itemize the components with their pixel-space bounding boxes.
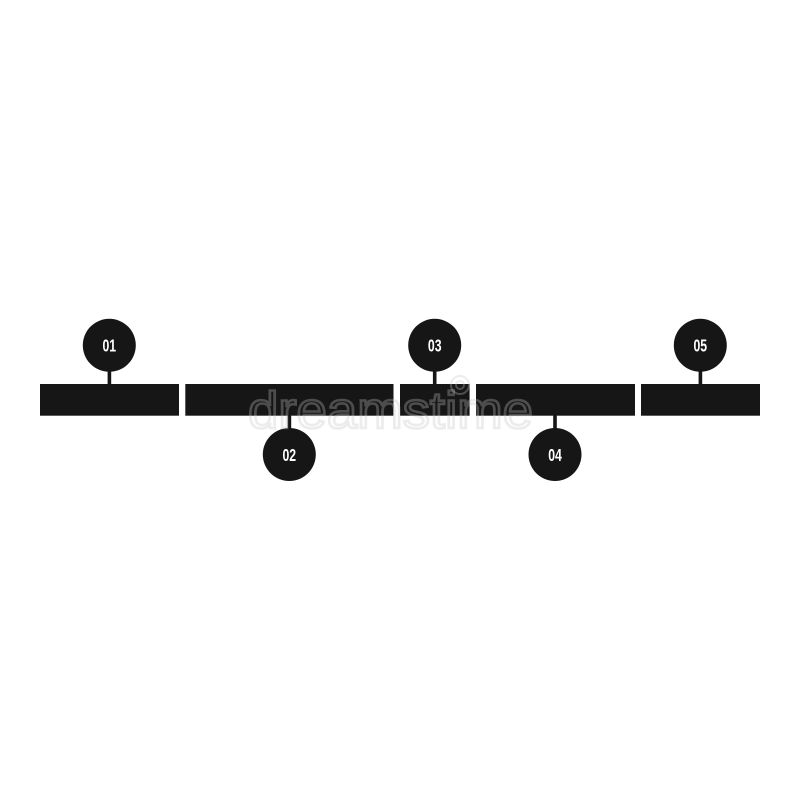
marker 03 [408,319,461,386]
marker 03: 03 [428,337,442,356]
marker 02 [263,414,316,481]
marker 02: 02 [282,446,296,466]
marker 01: 01 [102,337,116,356]
marker 01 [83,319,136,386]
marker 04: 04 [548,446,562,466]
marker 04 [528,414,582,481]
timeline bars [40,384,760,416]
marker 05 [674,319,727,386]
watermark: dreamstime [248,382,533,440]
marker 05: 05 [693,337,707,356]
